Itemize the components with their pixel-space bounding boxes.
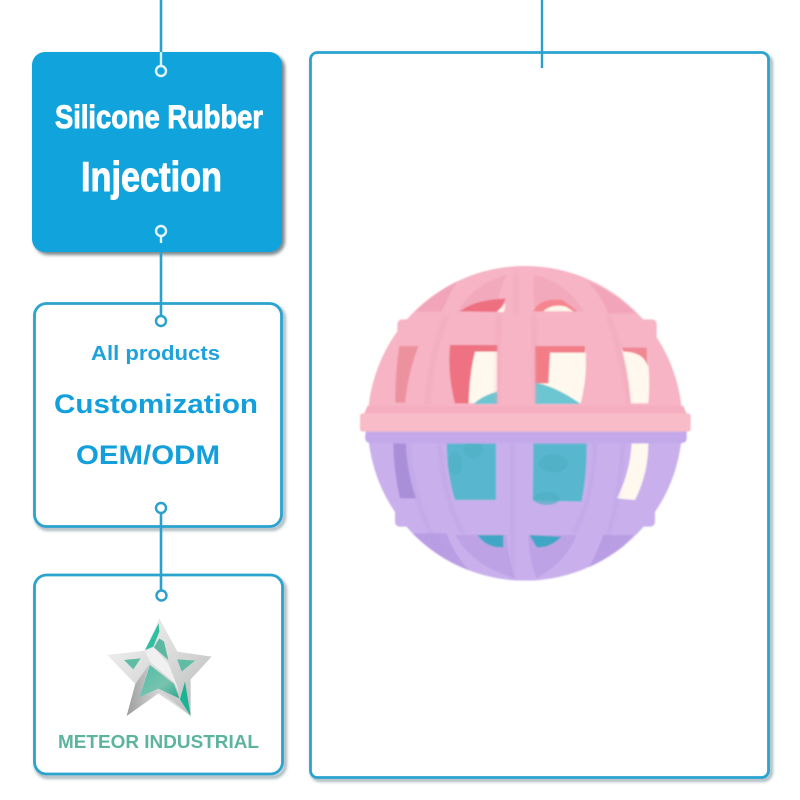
windows, lower row — [393, 443, 416, 498]
windows, upper row — [395, 346, 418, 403]
ring: title panel top — [156, 66, 166, 76]
icon: meteor star logo — [107, 618, 212, 716]
inner blue ball, lower — [477, 535, 562, 547]
inner blue ball, upper — [473, 383, 581, 404]
equator band — [360, 406, 691, 443]
panel: product — [310, 0, 771, 780]
rib shading — [494, 352, 632, 404]
ring: title panel bottom — [156, 226, 166, 243]
text: OEM/ODM: OEM/ODM — [76, 440, 220, 470]
title line 1: Silicone Rubber — [55, 99, 263, 135]
text: company name: METEOR INDUSTRIAL — [58, 731, 259, 752]
lower rib highlight — [398, 492, 650, 542]
craters on inner ball — [448, 444, 559, 506]
connector stub: logo panel — [156, 575, 166, 600]
connector: title to customization panel — [160, 252, 162, 303]
windows, top row — [460, 299, 506, 312]
product photo: silicone ball — [360, 260, 693, 583]
recessed top facets — [416, 282, 456, 312]
upper pink cage — [368, 265, 682, 407]
ring: customization panel top — [156, 303, 166, 326]
title line 2: Injection — [81, 153, 222, 200]
panel: customization — [34, 303, 284, 529]
recessed bottom facets — [413, 533, 468, 570]
lower rib shading — [616, 491, 620, 500]
connector: top of title panel — [160, 0, 162, 60]
horizontal rib highlight — [400, 303, 657, 353]
text: customization: Customization — [54, 389, 258, 419]
lower lilac cage — [368, 442, 682, 582]
panel: logo — [34, 575, 285, 777]
connector stub: title panel top — [160, 52, 162, 66]
connector: product panel — [541, 0, 543, 68]
connector: customization to logo panel — [156, 503, 166, 590]
text: all products: All products — [91, 343, 220, 365]
panel: title — [32, 52, 285, 255]
